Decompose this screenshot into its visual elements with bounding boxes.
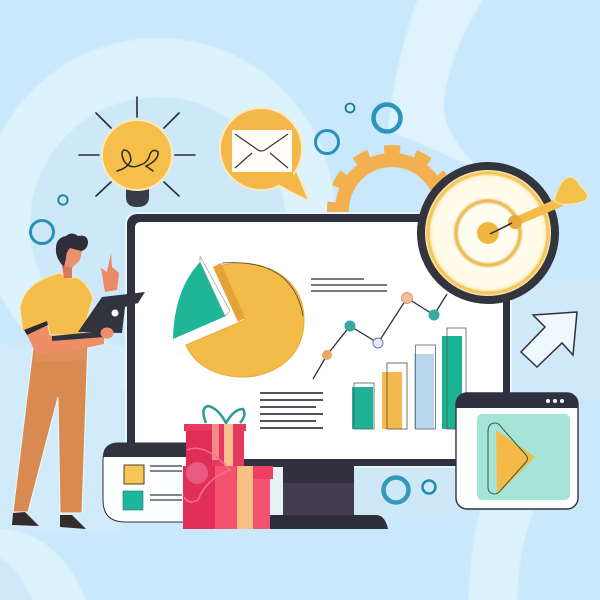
video window <box>456 393 578 509</box>
shirt <box>20 273 93 335</box>
envelope <box>232 130 292 172</box>
arm <box>24 320 104 354</box>
lower box <box>183 448 273 529</box>
head <box>56 234 88 278</box>
pie chart <box>173 256 304 377</box>
icon: light bulb <box>79 97 195 207</box>
bar chart <box>352 328 466 429</box>
dart <box>490 177 587 234</box>
ribbon bow <box>203 406 244 423</box>
shoes <box>12 512 39 526</box>
icon: gear <box>332 150 452 270</box>
text lines under chart <box>260 393 323 428</box>
monitor stand <box>270 466 388 529</box>
target <box>421 166 587 300</box>
play icon <box>488 423 535 495</box>
left list panel <box>103 443 190 522</box>
text lines near chart <box>311 279 387 291</box>
monitor <box>125 212 512 529</box>
legs <box>13 340 88 513</box>
person <box>12 234 145 529</box>
icon: mail bubble <box>220 108 309 201</box>
icon: decorative bubble rings <box>30 104 436 502</box>
upper box <box>184 424 246 468</box>
laptop <box>78 292 145 333</box>
raised hand <box>101 253 119 292</box>
line chart <box>313 292 447 379</box>
icon: cursor arrow <box>521 312 577 367</box>
gift boxes <box>183 406 283 529</box>
hand on laptop <box>100 328 114 338</box>
